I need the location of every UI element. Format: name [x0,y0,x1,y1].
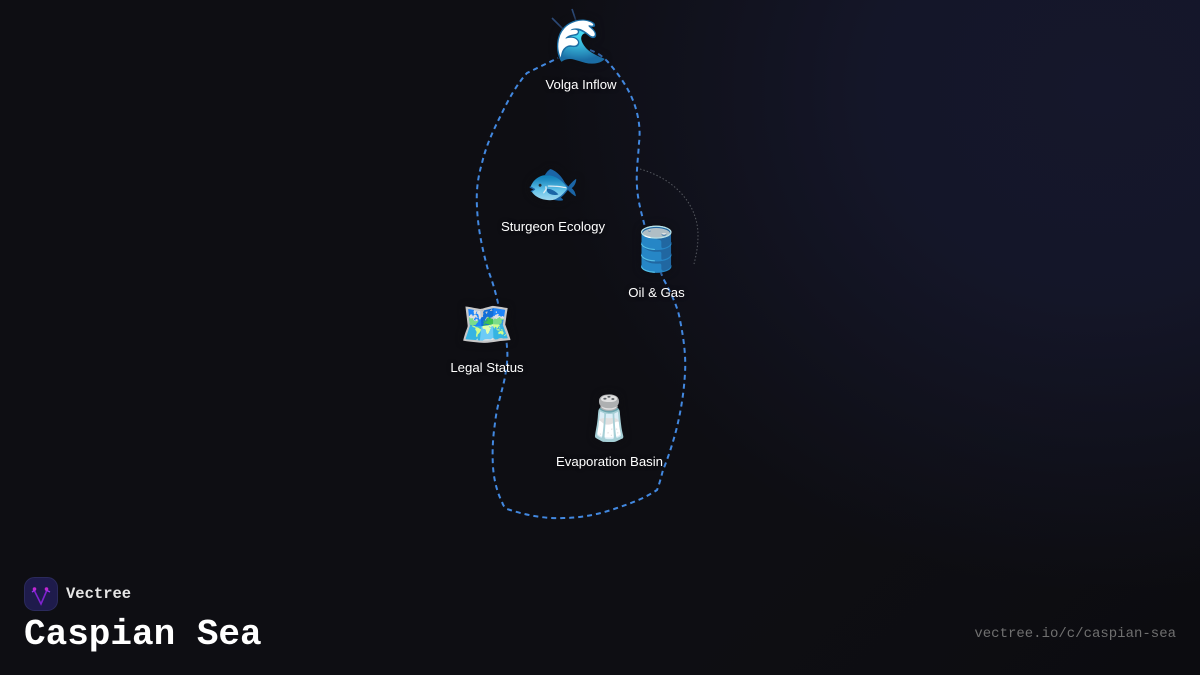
node: Oil & Gas: 🛢️ [630,225,683,275]
node: Evaporation Basin: Evaporation Basin [556,454,663,469]
sea outline dashed [477,50,685,518]
logo icon [24,577,58,611]
node: Evaporation Basin [556,394,666,469]
node: Oil & Gas: Oil & Gas [628,285,685,300]
dotted connector arc [640,169,698,264]
node: Evaporation Basin: 🧂 [583,394,636,444]
node: Volga Inflow: Volga Inflow [545,77,617,92]
url: vectree.io/c/caspian-sea [974,626,1176,642]
node: Legal Status: 🗺️ [460,300,514,350]
node: Volga Inflow [545,16,617,92]
title: Caspian Sea [24,614,262,655]
node: Sturgeon Ecology: 🐟 [526,159,580,209]
node: Legal Status: Legal Status [450,360,524,375]
river ticks [552,9,576,29]
node: Sturgeon Ecology [501,159,605,234]
node: Oil & Gas [628,222,685,300]
node: Legal Status [450,300,524,375]
node: Sturgeon Ecology: Sturgeon Ecology [501,219,605,234]
brand name: Vectree [66,585,131,603]
node: Volga Inflow: 🌊 [554,17,608,67]
